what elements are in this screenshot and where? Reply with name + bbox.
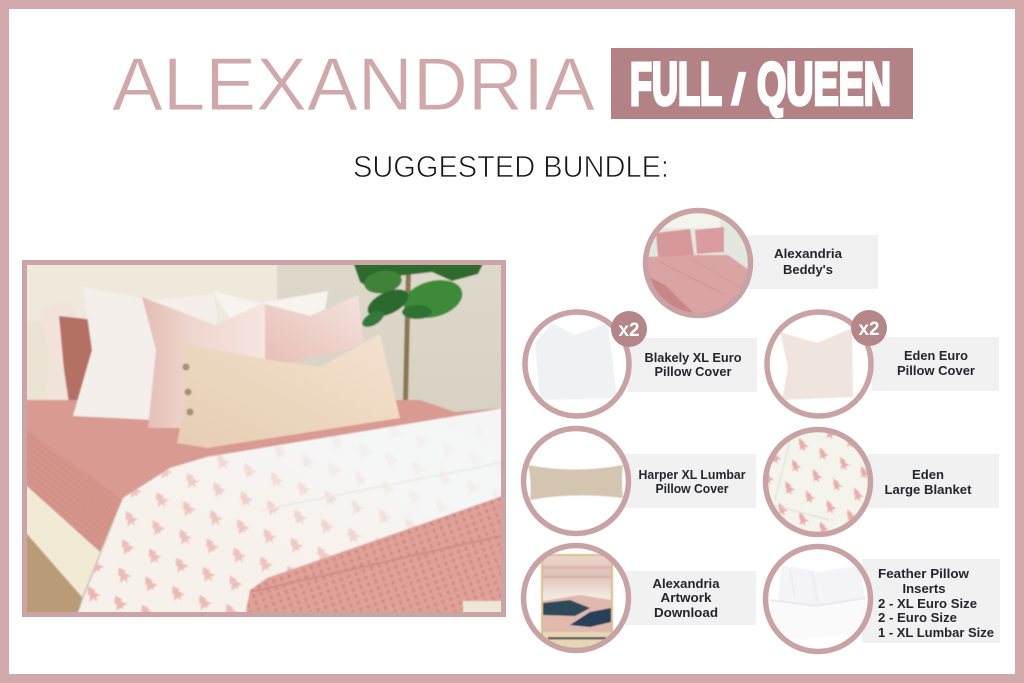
title: ALEXANDRIA — [112, 42, 595, 126]
label — [872, 337, 999, 391]
label: Pillow Cover — [656, 481, 728, 496]
size badge: full/queen: / — [731, 65, 746, 114]
label — [628, 338, 757, 392]
image: printed blanket in circle — [768, 432, 868, 532]
label: Pillow Cover — [897, 363, 975, 378]
item: Eden Euro Pillow Cover — [762, 310, 999, 420]
rear white pillow — [214, 290, 328, 318]
label — [625, 454, 756, 508]
label: Alexandria — [774, 246, 843, 261]
image: lumbar pillow in circle — [528, 464, 626, 500]
item: Harper XL Lumbar Pillow Cover — [520, 425, 756, 537]
item: Eden Large Blanket — [760, 424, 999, 540]
label: Eden — [912, 467, 944, 482]
label: Download — [654, 605, 718, 620]
item: Alexandria Artwork Download — [520, 542, 756, 654]
image: white pillow inserts in circle — [770, 566, 868, 622]
size badge: full/queen: QUEEN — [757, 50, 891, 118]
left white pillow — [73, 287, 222, 420]
image: white pillow in circle — [535, 324, 616, 400]
size badge: full/queen — [611, 48, 913, 119]
item: Alexandria Beddy's — [640, 205, 878, 321]
panel: bedroom photo — [20, 260, 510, 620]
label — [862, 559, 1000, 643]
size badge: full/queen: FULL — [630, 50, 722, 118]
badge: x2: x2 — [858, 319, 880, 340]
bed side — [27, 434, 120, 552]
item: Blakely XL Euro Pillow Cover — [520, 310, 757, 420]
left pink pillow — [142, 297, 265, 428]
item: Feather Pillow Inserts — [762, 543, 1000, 655]
label: Pillow Cover — [654, 364, 732, 379]
subheading: SUGGESTED BUNDLE: — [353, 150, 669, 184]
label: Large Blanket — [884, 482, 972, 497]
label — [625, 571, 756, 625]
image: framed artwork in circle — [540, 553, 626, 648]
label: 1 - XL Lumbar Size — [878, 625, 994, 640]
printed blanket — [77, 408, 505, 615]
label: 2 - Euro Size — [878, 610, 957, 625]
label: Blakely XL Euro — [644, 350, 742, 365]
cream lumbar pillow — [177, 334, 400, 448]
right pink pillow — [265, 295, 364, 368]
image: bed in circle — [648, 214, 748, 313]
label — [748, 235, 878, 289]
label: Eden Euro — [904, 348, 968, 363]
image: blush pillow in circle — [780, 328, 854, 400]
bed top surface — [20, 400, 505, 505]
label: Artwork — [660, 590, 712, 605]
label: Inserts — [902, 581, 946, 596]
label: 2 - XL Euro Size — [878, 596, 977, 611]
label: Alexandria — [652, 576, 720, 591]
plant — [353, 262, 484, 400]
label: Harper XL Lumbar — [638, 467, 746, 482]
badge: x2 — [611, 311, 647, 347]
terracotta pillow — [58, 315, 93, 401]
back floral pillow — [38, 300, 90, 405]
badge: x2: x2 — [618, 320, 640, 341]
bed frame — [27, 486, 100, 597]
label: Feather Pillow — [878, 566, 970, 581]
label: Beddy's — [783, 262, 833, 277]
badge: x2 — [851, 310, 887, 346]
label — [868, 454, 999, 508]
pink quilted throw — [246, 496, 501, 612]
